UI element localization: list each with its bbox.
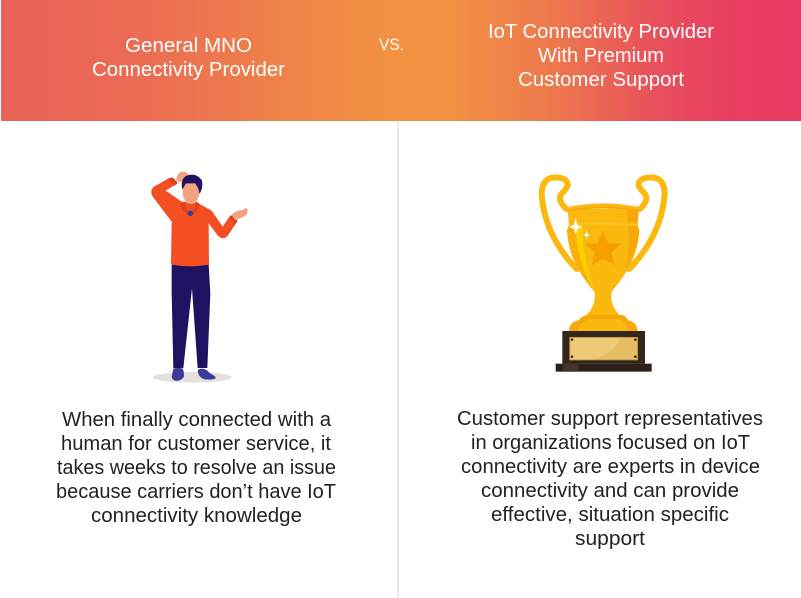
icon: confused man scratching head	[151, 172, 248, 383]
heading: General MNO Connectivity Provider	[92, 34, 285, 81]
text block: general MNO description: When finally connected with a	[62, 409, 332, 431]
heading: IoT Connectivity Provider With Premium Customer Support: IoT Connectivity Provider	[488, 20, 714, 43]
text block: general MNO description: because carriers don’t have IoT	[56, 481, 336, 503]
text block: IoT provider description: connectivity and can provide	[481, 480, 739, 502]
text block: general MNO description: human for customer service, it	[61, 433, 331, 455]
text block: IoT provider description: effective, situation specific	[491, 504, 729, 526]
text block: IoT provider description	[457, 408, 763, 550]
heading: IoT Connectivity Provider With Premium Customer Support: Customer Support	[518, 68, 684, 91]
sparkles	[569, 218, 590, 239]
trophy base	[556, 331, 652, 372]
heading: VS.: VS.	[379, 36, 404, 54]
star on cup	[585, 230, 622, 265]
heading: General MNO Connectivity Provider: Connectivity Provider	[92, 58, 285, 81]
text block: general MNO description	[56, 409, 336, 527]
text block: IoT provider description: connectivity are experts in device	[461, 456, 760, 478]
text block: general MNO description: connectivity knowledge	[91, 505, 302, 527]
text block: IoT provider description: in organizations focused on IoT	[471, 432, 750, 454]
heading: IoT Connectivity Provider With Premium Customer Support: With Premium	[538, 44, 664, 67]
text block: IoT provider description: support	[575, 528, 645, 550]
text block: general MNO description: takes weeks to resolve an issue	[57, 457, 336, 479]
header band	[1, 0, 801, 121]
heading: IoT Connectivity Provider With Premium Customer Support	[488, 20, 714, 91]
heading: General MNO Connectivity Provider: General MNO	[125, 34, 252, 57]
icon: gold trophy	[542, 177, 665, 372]
text block: IoT provider description: Customer support representatives	[457, 408, 763, 430]
trophy handles	[542, 177, 665, 269]
